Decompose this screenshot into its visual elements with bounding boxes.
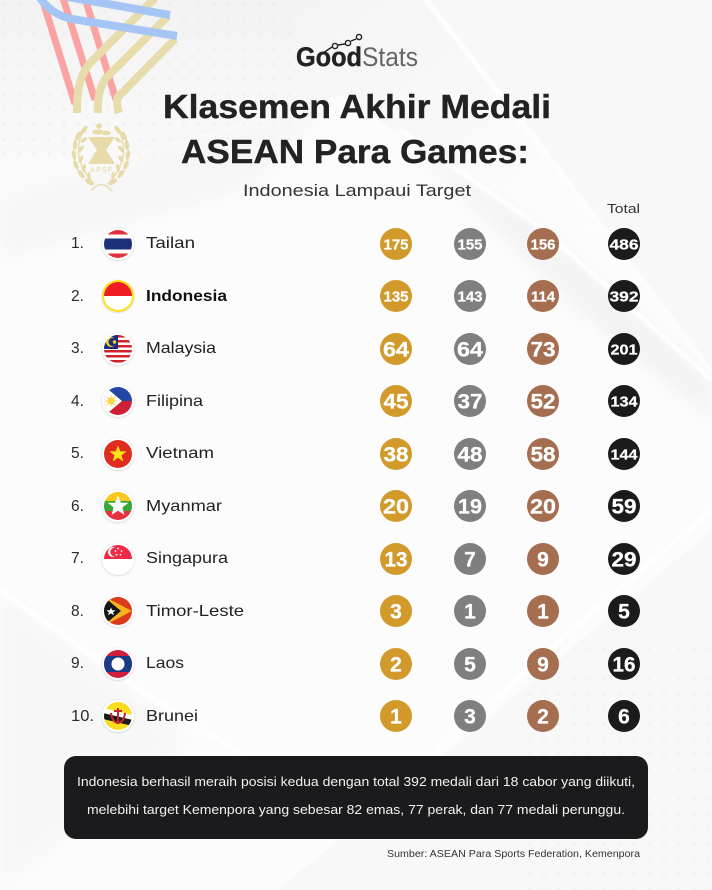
source note: Sumber: ASEAN Para Sports Federation, Kemenpora xyxy=(387,849,640,860)
row: Vietnam xyxy=(71,438,640,470)
row: Laos xyxy=(71,648,640,680)
bronze count: 9 xyxy=(537,654,549,676)
total count: 201 xyxy=(610,342,638,358)
silver count: 155 xyxy=(458,236,482,254)
gold count xyxy=(380,595,412,627)
bronze count xyxy=(527,490,559,522)
row: Tailan xyxy=(71,228,640,260)
country name: Timor-Leste xyxy=(146,603,244,620)
silver count: 3 xyxy=(464,706,476,728)
bronze count xyxy=(527,333,559,365)
total count: 59 xyxy=(612,496,636,518)
country name: Myanmar xyxy=(146,498,223,515)
row: Myanmar xyxy=(71,490,640,522)
gold count xyxy=(380,543,412,575)
row: Filipina xyxy=(71,385,640,417)
silver count: 5 xyxy=(464,654,476,676)
gold count: 38 xyxy=(384,444,409,466)
icon: flag Malaysia xyxy=(102,333,134,365)
total count: 144 xyxy=(610,446,638,464)
rank: 3. xyxy=(71,340,84,357)
country name: Tailan xyxy=(146,235,195,252)
bronze count: 73 xyxy=(530,338,556,362)
silver count: 64 xyxy=(457,338,483,362)
silver count: 19 xyxy=(458,496,482,518)
gold count xyxy=(380,333,412,365)
icon: flag Brunei xyxy=(102,700,134,732)
total count: 486 xyxy=(610,236,638,254)
bronze count: 1 xyxy=(537,600,549,624)
logo trend line xyxy=(323,34,362,53)
bronze count: 114 xyxy=(531,288,556,306)
callout xyxy=(64,756,648,839)
icon: flag Laos xyxy=(102,648,134,680)
silver count xyxy=(454,595,486,627)
row: Indonesia xyxy=(71,280,640,312)
bronze count: 9 xyxy=(537,548,549,572)
icon: flag Myanmar xyxy=(102,490,134,522)
callout text xyxy=(77,774,635,817)
logo: GoodStats: Stats xyxy=(362,42,418,72)
total count xyxy=(608,280,640,312)
gold count: 135 xyxy=(384,288,408,306)
total count xyxy=(608,700,640,732)
gold count xyxy=(380,280,412,312)
rank: 7. xyxy=(71,550,84,567)
bronze count: 156 xyxy=(530,236,556,254)
title: Klasemen Akhir Medali xyxy=(163,88,551,125)
total count xyxy=(608,648,640,680)
bronze count xyxy=(527,228,559,260)
country name: Indonesia xyxy=(146,288,227,305)
silver count xyxy=(454,280,486,312)
total count xyxy=(608,490,640,522)
subtitle: Indonesia Lampaui Target xyxy=(243,181,471,200)
country name: Brunei xyxy=(146,708,198,725)
silver count xyxy=(454,228,486,260)
bronze count: 52 xyxy=(530,390,556,414)
icon: flag Thailand xyxy=(102,228,134,260)
total count xyxy=(608,228,640,260)
silver count: 143 xyxy=(458,288,482,306)
silver count: 7 xyxy=(464,548,476,572)
total count xyxy=(608,595,640,627)
total count xyxy=(608,385,640,417)
gold count: 20 xyxy=(383,496,409,518)
rank: 5. xyxy=(71,445,84,462)
silver count xyxy=(454,490,486,522)
silver count xyxy=(454,543,486,575)
rank: 2. xyxy=(71,288,84,305)
gold count xyxy=(380,385,412,417)
logo wordmark: Good xyxy=(296,42,362,72)
bronze count xyxy=(527,543,559,575)
total count xyxy=(608,438,640,470)
bronze count xyxy=(527,595,559,627)
title xyxy=(163,88,551,170)
bronze count xyxy=(527,438,559,470)
row: Timor-Leste xyxy=(71,595,640,627)
gold count xyxy=(380,438,412,470)
total count: 16 xyxy=(612,654,636,676)
icon: flag Vietnam xyxy=(102,438,134,470)
gold count xyxy=(380,648,412,680)
bronze count: 2 xyxy=(537,706,549,728)
country name: Laos xyxy=(146,655,184,672)
silver count: 37 xyxy=(458,390,482,414)
silver count xyxy=(454,700,486,732)
country name: Filipina xyxy=(146,393,203,410)
medal ribbon xyxy=(40,0,177,113)
country name: Vietnam xyxy=(146,445,214,462)
rank: 6. xyxy=(71,498,84,515)
logo: GoodStats xyxy=(296,34,418,72)
silver count xyxy=(454,333,486,365)
row: Brunei xyxy=(71,700,640,732)
total count: 392 xyxy=(610,288,638,306)
silver count: 1 xyxy=(464,600,476,624)
country name: Singapura xyxy=(146,550,228,567)
rank: 1. xyxy=(71,235,84,252)
silver count xyxy=(454,438,486,470)
rank: 4. xyxy=(71,393,84,410)
gold count: 45 xyxy=(384,390,409,414)
column header: total: Total xyxy=(607,201,640,216)
icon: flag Timor-Leste xyxy=(102,595,134,627)
total count: 29 xyxy=(612,548,636,572)
rank: 8. xyxy=(71,603,84,620)
total count: 6 xyxy=(618,706,630,728)
bronze count xyxy=(527,700,559,732)
gold count xyxy=(380,700,412,732)
callout text: melebihi target Kemenpora yang sebesar 82 emas, 77 perak, dan 77 medali perunggu. xyxy=(87,802,625,817)
gold count: 2 xyxy=(390,654,402,676)
total count: 5 xyxy=(618,600,630,624)
bronze count: 58 xyxy=(530,444,556,466)
gold count: 175 xyxy=(384,236,408,254)
silver count xyxy=(454,385,486,417)
icon: flag Singapore xyxy=(102,543,134,575)
callout text: Indonesia berhasil meraih posisi kedua dengan total 392 medali dari 18 cabor yang diikuti, xyxy=(77,774,635,789)
silver count: 48 xyxy=(458,444,483,466)
rank: 10. xyxy=(71,708,94,725)
gold count xyxy=(380,228,412,260)
title: ASEAN Para Games: xyxy=(181,133,529,170)
total count: 134 xyxy=(610,394,638,410)
gold count: 1 xyxy=(390,706,402,728)
country name: Malaysia xyxy=(146,340,216,357)
icon: flag Philippines xyxy=(102,385,134,417)
total count xyxy=(608,543,640,575)
gold count: 64 xyxy=(383,338,409,362)
row: Singapura xyxy=(71,543,640,575)
gold count xyxy=(380,490,412,522)
icon: APSF emblem xyxy=(71,123,131,191)
gold count: 13 xyxy=(384,548,408,572)
bronze count xyxy=(527,385,559,417)
icon: flag Indonesia xyxy=(102,280,134,312)
rank: 9. xyxy=(71,655,84,672)
total count xyxy=(608,333,640,365)
emblem label: APSF xyxy=(90,167,113,174)
bronze count: 20 xyxy=(530,496,556,518)
row: Malaysia xyxy=(71,333,640,365)
bronze count xyxy=(527,648,559,680)
gold count: 3 xyxy=(390,600,402,624)
bronze count xyxy=(527,280,559,312)
silver count xyxy=(454,648,486,680)
